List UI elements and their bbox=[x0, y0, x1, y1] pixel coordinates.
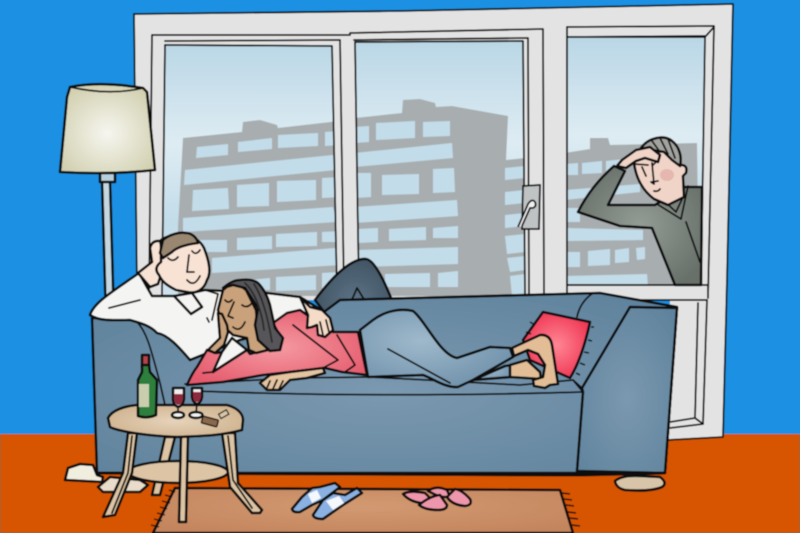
man: face bbox=[168, 250, 200, 283]
table: shelf bbox=[128, 461, 228, 483]
orange floor bbox=[0, 434, 800, 533]
peeping man: head bbox=[634, 145, 686, 205]
woman: hand on sofa bbox=[260, 368, 325, 390]
woman: sweater bbox=[187, 310, 367, 385]
lamp pole bbox=[102, 180, 114, 320]
white object on floor bbox=[65, 464, 103, 482]
pane outlines bbox=[162, 37, 705, 296]
table: right leg bbox=[222, 433, 262, 513]
man: forearm behind head bbox=[138, 241, 165, 287]
pink slippers bbox=[403, 488, 471, 510]
lamp collar bbox=[100, 172, 115, 182]
reclining woman bbox=[187, 280, 513, 390]
man: collar bbox=[174, 293, 202, 314]
woman: face features bbox=[225, 300, 252, 329]
peeping man: cheek bbox=[660, 169, 674, 181]
woman's feet bbox=[510, 335, 558, 388]
side table bbox=[103, 355, 262, 522]
sofa arm right bbox=[577, 307, 677, 473]
peeping man: body and raised arm bbox=[578, 166, 702, 285]
blue slippers bbox=[292, 483, 362, 519]
table: front left leg bbox=[103, 433, 137, 517]
sofa seat lines bbox=[185, 377, 583, 392]
woman: face bbox=[218, 284, 268, 353]
sofa bottom line bbox=[97, 473, 665, 475]
woman: hair bbox=[223, 280, 283, 351]
foot: lower bbox=[510, 360, 541, 379]
wine glass right bbox=[190, 388, 202, 418]
woman: hand at cheek bbox=[208, 313, 228, 353]
peeping man in the window bbox=[578, 137, 702, 285]
table: top bbox=[108, 405, 243, 437]
window pane middle with building bbox=[350, 38, 530, 300]
woman: lower leg bbox=[473, 365, 512, 380]
floor lamp bbox=[60, 84, 155, 320]
peeping man: hair bbox=[641, 137, 681, 166]
rug bbox=[151, 488, 580, 533]
window frame below the sill bbox=[568, 285, 708, 428]
woman: jeans bbox=[360, 310, 513, 387]
man: shirt and arm bbox=[90, 273, 330, 360]
wine glass left bbox=[172, 388, 184, 418]
peeping man: collar bbox=[657, 186, 688, 219]
slipper left bbox=[292, 483, 340, 512]
wine bottle bbox=[138, 355, 157, 417]
left sofa foot bbox=[98, 477, 148, 492]
peeping man: face features bbox=[634, 160, 660, 191]
woman: collar bbox=[213, 338, 247, 372]
corkscrew and cork bbox=[201, 410, 229, 427]
man: head bbox=[156, 235, 209, 292]
window frame bbox=[134, 4, 733, 440]
window pane right with building bbox=[565, 35, 707, 287]
table: back legs bbox=[152, 437, 175, 495]
red pillow bbox=[522, 312, 594, 378]
sofa foot right bbox=[615, 476, 665, 491]
slipper right bbox=[313, 488, 362, 519]
reclining man bbox=[90, 233, 330, 360]
man: hair bbox=[160, 233, 198, 258]
sofa arm left bbox=[137, 322, 165, 420]
foot: upper bbox=[512, 335, 558, 388]
sofa bbox=[92, 293, 677, 491]
man's raised leg bbox=[315, 259, 396, 345]
man's hand on woman's shoulder bbox=[300, 297, 333, 337]
table: center leg bbox=[179, 435, 188, 522]
peeping man: hand on forehead bbox=[617, 147, 660, 168]
lamp shade bbox=[60, 84, 155, 173]
door handle bbox=[518, 185, 540, 229]
window pane left with building bbox=[160, 40, 340, 300]
sofa back rest bbox=[92, 293, 677, 473]
